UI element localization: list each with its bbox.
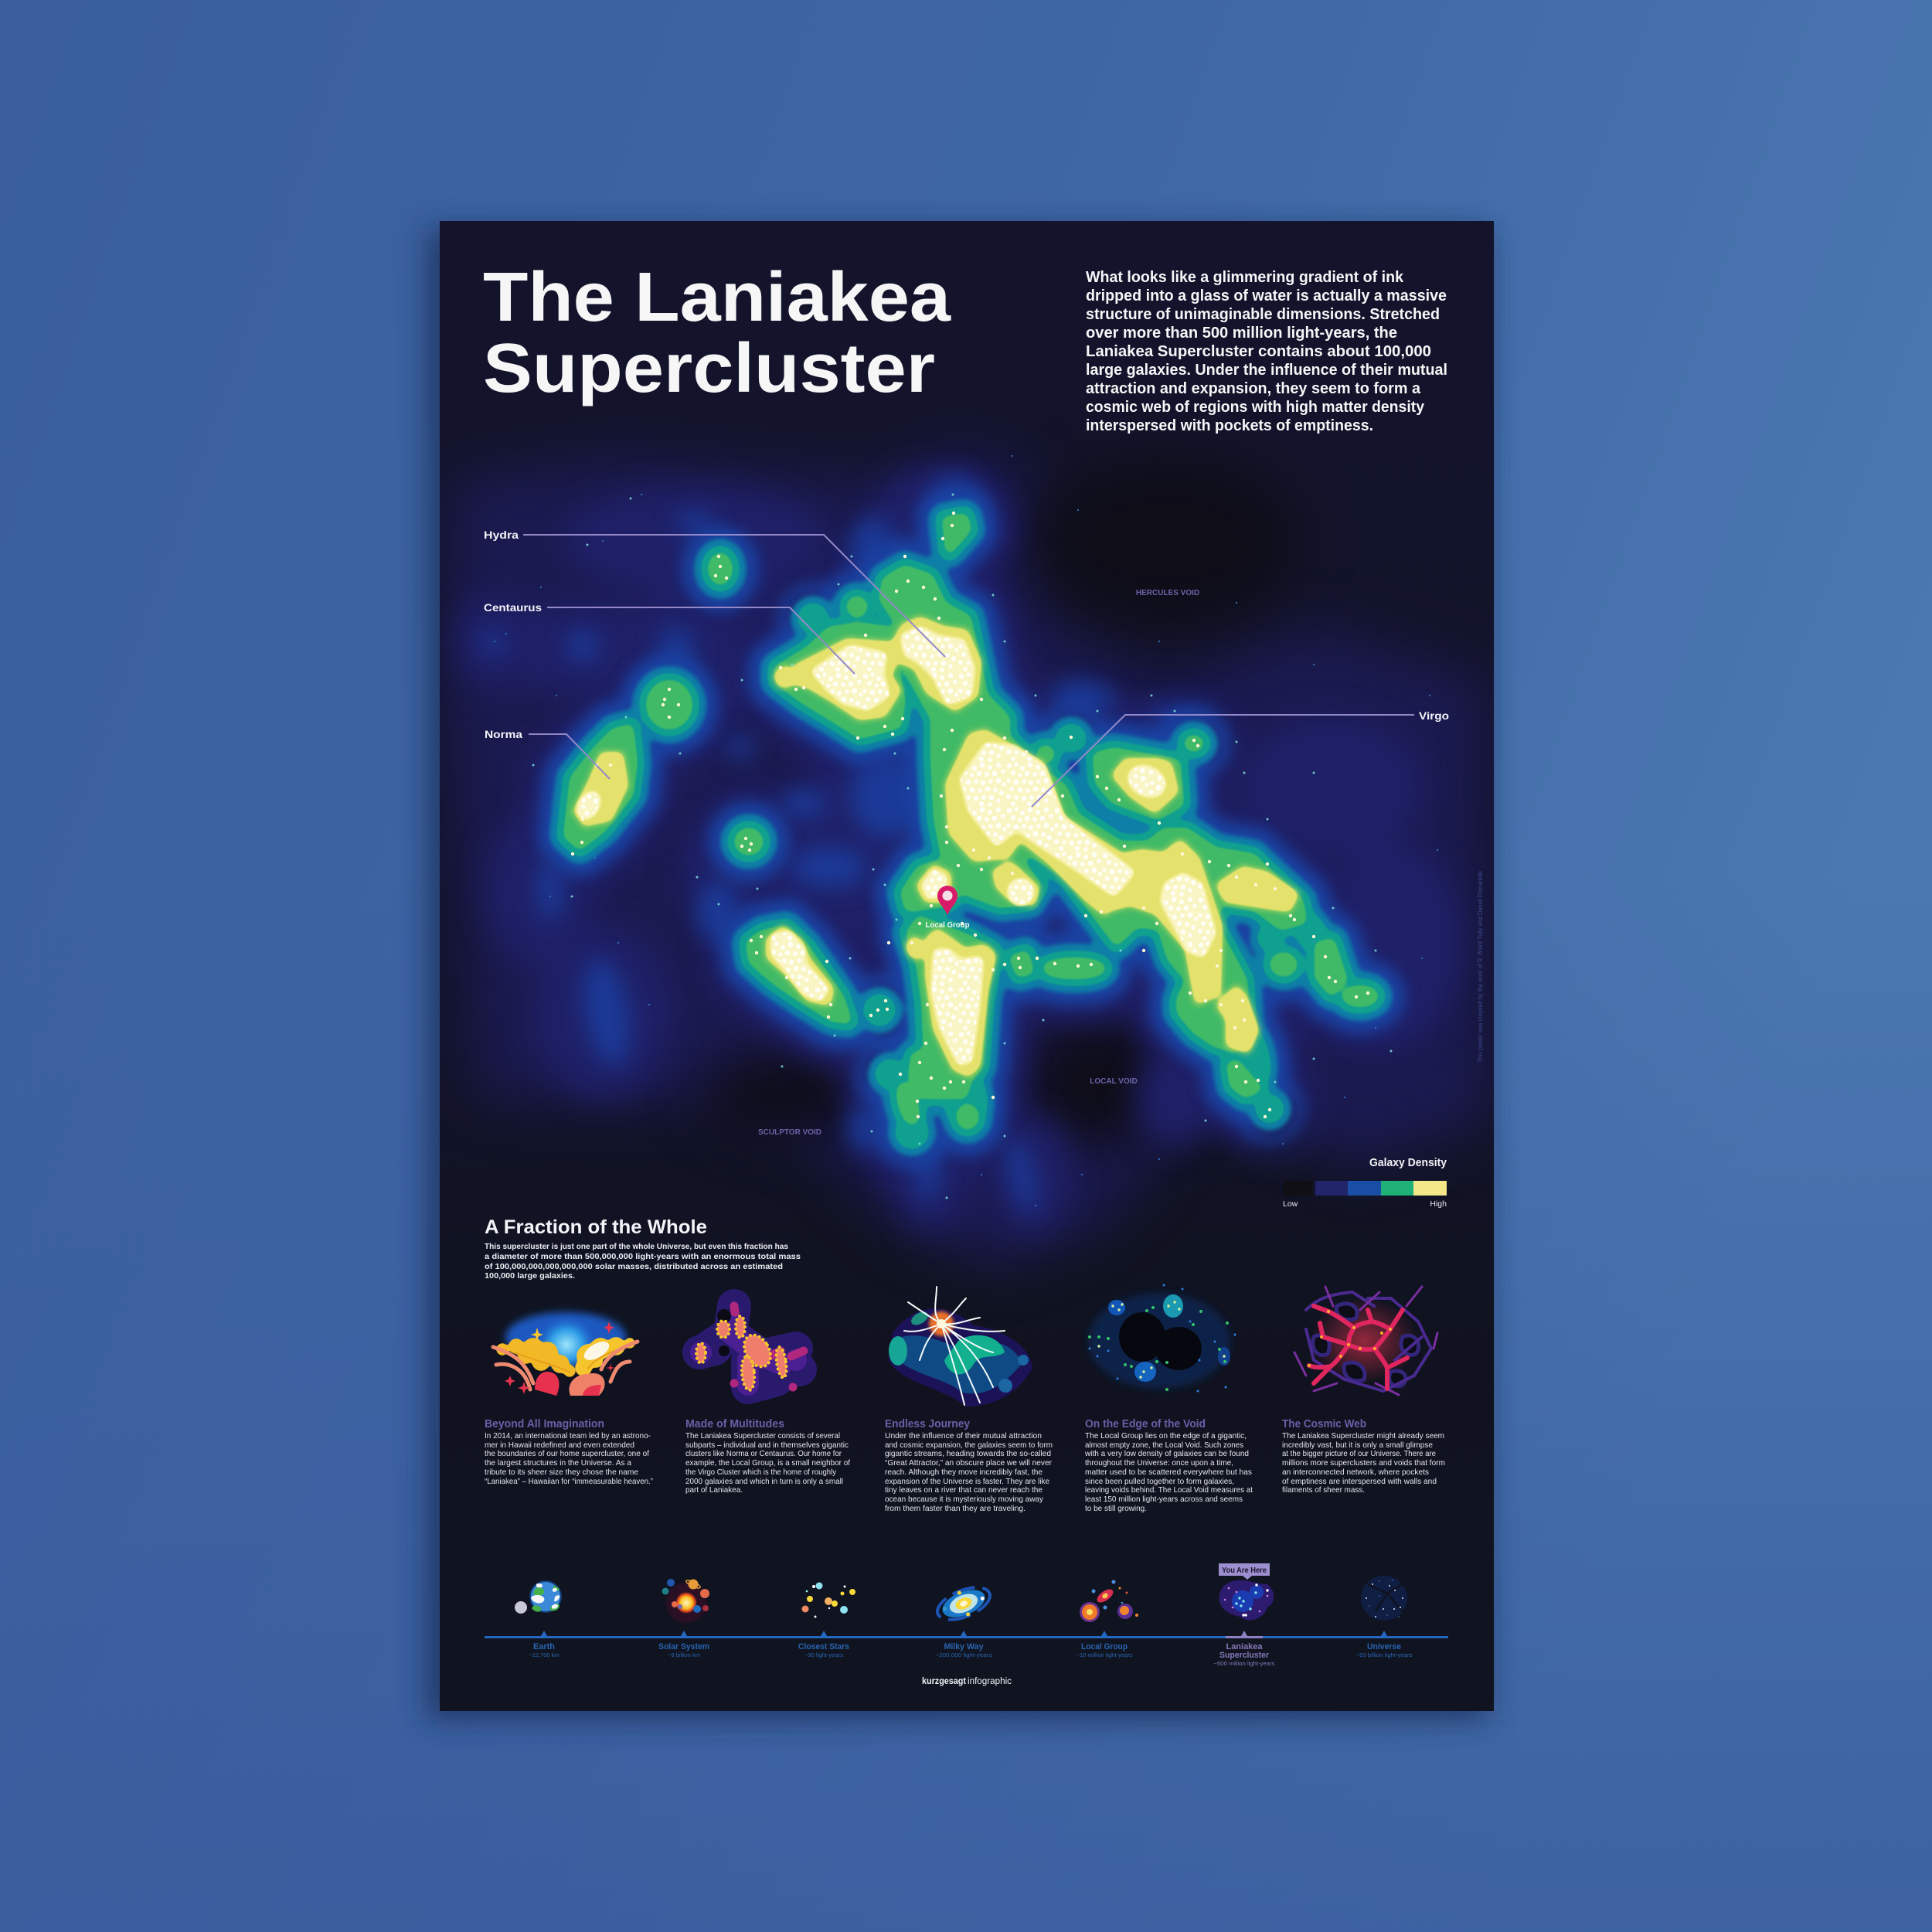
column: The Cosmic Web: incredibly vast, but it is only a small glimpse [1282, 1440, 1433, 1450]
intro text: over more than 500 million light-years, the [1086, 325, 1397, 342]
title: The Laniakea [483, 259, 951, 336]
legend: galaxy density: High [1430, 1199, 1447, 1209]
column: Beyond All Imagination [485, 1418, 653, 1486]
legend: galaxy density [1283, 1156, 1447, 1209]
column: On the Edge of the Void: throughout the Universe: once upon a time, [1085, 1458, 1233, 1468]
column: The Cosmic Web: The Laniakea Supercluster might already seem [1282, 1431, 1444, 1440]
column: Made of Multitudes: the Virgo Cluster which is the home of roughly [685, 1468, 837, 1477]
column: Made of Multitudes: part of Laniakea. [685, 1485, 743, 1495]
credit text: This poster was inspired by the work of R. Brent Tully and Daniel Pomarède [1476, 871, 1484, 1063]
intro: fraction [485, 1242, 801, 1281]
column: Beyond All Imagination: In 2014, an international team led by an astrono- [485, 1431, 651, 1440]
column: Endless Journey: tiny leaves on a river that can never reach the [885, 1485, 1043, 1495]
column: Endless Journey: ocean because it is mysteriously moving away [885, 1495, 1044, 1504]
column: Beyond All Imagination: “Laniakea” – Hawaiian for “immeasurable heaven.” [485, 1477, 653, 1486]
column: On the Edge of the Void: matter used to be scattered everywhere but has [1085, 1468, 1252, 1477]
scale label: Milky Way [935, 1642, 992, 1658]
illustration: cosmic web [1294, 1287, 1437, 1395]
voids [703, 456, 1298, 1148]
icon: Universe [1361, 1576, 1407, 1621]
column: Endless Journey: expansion of the Universe is faster. They are like [885, 1477, 1049, 1486]
illustration: streams [889, 1287, 1032, 1406]
intro text: large galaxies. Under the influence of their mutual [1086, 362, 1447, 379]
legend: galaxy density: Low [1283, 1199, 1298, 1209]
scale label: Earth: ~12,700 km [529, 1651, 560, 1658]
scale label: Local Group: Local Group [1081, 1642, 1128, 1651]
column: On the Edge of the Void: since been pulled together to form galaxies, [1085, 1477, 1234, 1486]
intro: fraction: of 100,000,000,000,000,000 solar masses, distributed across an estimated [485, 1262, 783, 1271]
intro: fraction: a diameter of more than 500,000,000 light-years with an enormous total mass [485, 1252, 801, 1261]
column: Endless Journey: “Great Attractor,” an obscure place we will never [885, 1458, 1052, 1468]
illustration: explosion [493, 1312, 638, 1396]
intro text: What looks like a glimmering gradient of ink [1086, 269, 1404, 286]
column: On the Edge of the Void: with a very low density of galaxies can be found [1084, 1449, 1249, 1458]
column: Endless Journey: Endless Journey [885, 1418, 970, 1430]
scale label: Universe: Universe [1367, 1642, 1401, 1651]
callout: Hydra: Hydra [484, 529, 519, 541]
footer credit: kurzgesagt [922, 1677, 966, 1686]
column: Made of Multitudes: The Laniakea Supercluster consists of several [685, 1431, 840, 1440]
title: Supercluster [483, 330, 935, 407]
column: The Cosmic Web: filaments of sheer mass. [1282, 1485, 1365, 1495]
column: Endless Journey: Under the influence of their mutual attraction [885, 1431, 1042, 1440]
column: The Cosmic Web: millions more superclusters and voids that form [1282, 1458, 1445, 1468]
callout: Virgo [1032, 709, 1449, 807]
scale label: Laniakea Supercluster [1213, 1642, 1275, 1667]
column: The Cosmic Web: The Cosmic Web [1282, 1418, 1366, 1430]
scale label: Laniakea Supercluster: Supercluster [1219, 1651, 1270, 1660]
footer credit: infographic [968, 1677, 1012, 1686]
column: Beyond All Imagination: tribute to its sheer size they chose the name [485, 1468, 638, 1477]
column: Endless Journey [885, 1418, 1053, 1513]
column: Beyond All Imagination: the boundaries of our home supercluster, one of [485, 1449, 649, 1458]
icon: Solar System [662, 1579, 709, 1623]
legend: galaxy density: Galaxy Density [1369, 1156, 1447, 1169]
column: Made of Multitudes: subparts – individual and in themselves gigantic [685, 1440, 849, 1450]
scale label: Earth [529, 1642, 560, 1658]
column: The Cosmic Web [1282, 1418, 1445, 1495]
intro text: cosmic web of regions with high matter density [1086, 399, 1425, 416]
intro text: dripped into a glass of water is actually a massive [1086, 287, 1447, 304]
column: On the Edge of the Void: leaving voids behind. The Local Void measures at [1085, 1485, 1253, 1495]
column: Endless Journey: reach. Although they move incredibly fast, the [885, 1468, 1043, 1477]
callout: Virgo: Virgo [1419, 709, 1449, 722]
scale label: Closest Stars [798, 1642, 849, 1658]
intro text: Laniakea Supercluster contains about 100,000 [1086, 343, 1431, 360]
icon: Laniakea [1219, 1580, 1274, 1621]
scale label: Closest Stars: Closest Stars [798, 1642, 849, 1651]
column: On the Edge of the Void: to be still growing. [1085, 1504, 1147, 1513]
column: On the Edge of the Void: almost empty zone, the Local Void. Such zones [1085, 1440, 1243, 1450]
label: You Are Here: You Are Here [1222, 1566, 1267, 1575]
callout: Norma: Norma [485, 728, 522, 740]
column: Beyond All Imagination: mer in Hawaii redefined and even extended [485, 1440, 634, 1450]
column: Made of Multitudes: Made of Multitudes [685, 1418, 784, 1430]
label: You Are Here [1219, 1563, 1270, 1580]
callout: Centaurus: Centaurus [484, 601, 542, 614]
scale label: Closest Stars: ~30 light-years [804, 1651, 843, 1658]
poster [440, 221, 1494, 1711]
label: Local Void: LOCAL VOID [1090, 1077, 1138, 1086]
scale label: Laniakea Supercluster: ~500 million light-years [1213, 1660, 1275, 1667]
marker: Local Group [926, 886, 969, 930]
scale label: Milky Way: Milky Way [944, 1642, 984, 1651]
intro text [1086, 269, 1447, 434]
illustration: clusters [696, 1306, 804, 1391]
icon: Closest Stars [802, 1583, 855, 1618]
column: Beyond All Imagination: the largest structures in the Universe. As a [485, 1458, 631, 1468]
scale label: Earth: Earth [533, 1642, 555, 1651]
column: Endless Journey: from them faster than they are traveling. [885, 1504, 1026, 1513]
galaxies [495, 456, 1437, 1206]
column: The Cosmic Web: an interconnected network, where pockets [1282, 1468, 1429, 1477]
column: Made of Multitudes: example, the Local Group, is a small neighbor of [685, 1458, 850, 1468]
intro text: attraction and expansion, they seem to form a [1086, 380, 1421, 397]
intro text: interspersed with pockets of emptiness. [1086, 417, 1373, 434]
column: On the Edge of the Void: On the Edge of the Void [1085, 1418, 1206, 1430]
heading: A Fraction of the Whole: A Fraction of the Whole [485, 1216, 707, 1238]
column: Made of Multitudes: clusters like Norma or Centaurus. Our home for [685, 1449, 842, 1458]
illustration: void [1088, 1285, 1235, 1391]
column: Endless Journey: and cosmic expansion, the galaxies seem to form [885, 1440, 1053, 1450]
marker: Local Group: Local Group [926, 920, 969, 930]
poster shadow [427, 229, 1489, 1720]
column: Made of Multitudes: 2000 galaxies and which in turn is only a small [685, 1477, 843, 1486]
intro: fraction: 100,000 large galaxies. [485, 1271, 575, 1281]
scale label: Solar System: ~9 billion km [668, 1651, 700, 1658]
scale label: Universe [1355, 1642, 1413, 1658]
column: On the Edge of the Void [1084, 1418, 1253, 1513]
scale label: Local Group [1076, 1642, 1133, 1658]
icon: Local Group [1080, 1580, 1138, 1622]
column: The Cosmic Web: of emptiness are interspersed with walls and [1282, 1477, 1437, 1486]
callout: Norma [485, 728, 610, 779]
column: The Cosmic Web: at the bigger picture of our Universe. There are [1282, 1449, 1436, 1458]
scale label: Universe: ~93 billion light-years [1355, 1651, 1413, 1658]
column: Beyond All Imagination: Beyond All Imagination [485, 1418, 604, 1430]
icon: Earth [515, 1580, 562, 1614]
scale label: Local Group: ~10 million light-years [1076, 1651, 1133, 1658]
label: Hercules Void: HERCULES VOID [1136, 589, 1199, 597]
icon: Milky Way [933, 1580, 995, 1627]
intro: fraction: This supercluster is just one part of the whole Universe, but even this fraction has [485, 1242, 788, 1251]
scale label: Laniakea Supercluster: Laniakea [1226, 1642, 1263, 1651]
scale timeline [485, 1563, 1448, 1667]
label: Sculptor Void: SCULPTOR VOID [758, 1128, 821, 1137]
footer credit [922, 1677, 1012, 1686]
scale label: Solar System [658, 1642, 709, 1658]
column: On the Edge of the Void: least 150 million light-years across and seems [1085, 1495, 1243, 1504]
column: Endless Journey: gigantic streams, heading towards the so-called [885, 1449, 1051, 1458]
callout: Centaurus [484, 601, 855, 674]
column: Made of Multitudes [685, 1418, 850, 1495]
scale label: Solar System: Solar System [658, 1642, 709, 1651]
density map [444, 444, 1488, 1267]
intro text: structure of unimaginable dimensions. Stretched [1086, 306, 1440, 323]
callout: Hydra [484, 529, 945, 657]
title [483, 259, 951, 407]
column: On the Edge of the Void: The Local Group lies on the edge of a gigantic, [1085, 1431, 1247, 1440]
scale label: Milky Way: ~200,000 light-years [935, 1651, 992, 1658]
